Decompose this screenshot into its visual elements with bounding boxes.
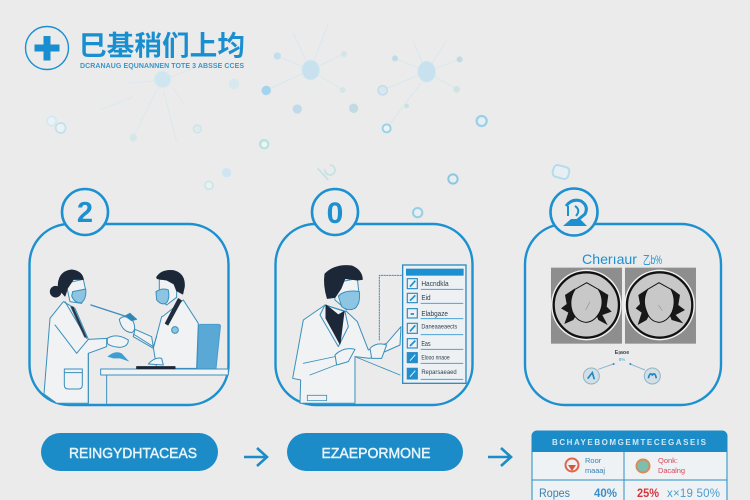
panel 3 heading: Cherıaur — [582, 251, 637, 267]
step number badge 2 — [312, 189, 358, 235]
panel 2: clinician checklist — [276, 189, 472, 405]
step number badge 1 — [62, 189, 108, 235]
illustration: masked doctor — [293, 266, 402, 403]
illustration: two masked doctors at desk — [44, 270, 228, 403]
checklist card: Reparsaeaed — [421, 370, 457, 376]
checklist card: Daneaaeaects — [421, 325, 457, 331]
checklist card: Elabgaze — [421, 311, 448, 318]
panel 3: chest imaging comparison — [525, 188, 721, 405]
table icon right — [636, 460, 650, 472]
checklist card: Eas — [421, 341, 431, 348]
checklist card: Eid — [421, 295, 431, 302]
checklist card: Elooo nnaoe — [421, 356, 450, 362]
arrow 2 — [488, 448, 511, 466]
label pill 2 — [287, 433, 463, 471]
table row values — [539, 488, 720, 500]
background: neuron network decoration — [47, 23, 570, 217]
checklist card: Hacndkla — [421, 281, 449, 288]
results table: maaaj — [585, 466, 605, 475]
table row values: 25% — [637, 488, 659, 500]
scan images — [551, 268, 696, 344]
table icon left — [566, 458, 578, 472]
table row values: x×19 50% — [667, 488, 720, 500]
title: 巳基稍们上均 — [79, 30, 245, 61]
checklist card — [403, 265, 466, 383]
label pill 2: EZAEPORMONE — [322, 446, 431, 462]
result icons with connectors — [583, 363, 660, 384]
logo icon: medical cross — [26, 26, 68, 70]
panel 3: chest imaging comparison: 8% — [619, 357, 625, 362]
step number badge 2: 0 — [327, 197, 343, 230]
table header — [532, 431, 727, 452]
step badge 3 — [550, 188, 598, 236]
table label left: Roor — [585, 456, 602, 465]
results table — [532, 431, 727, 500]
label pill 1 — [41, 433, 218, 471]
label pill 1: REINGYDHTACEAS — [69, 446, 197, 462]
subtitle: DCRANAUG EQUNANNEN TOTE 3 ABSSE CCES — [80, 63, 244, 70]
step number badge 1: 2 — [77, 197, 93, 229]
panel 1: consultation — [30, 189, 228, 405]
scan caption: Eᴉaoe — [615, 350, 629, 356]
table header: BCHAYEBOMGEMTECEGASEIS — [552, 438, 707, 447]
table row values: 40% — [594, 488, 617, 500]
panel 3: chest imaging comparison: 乙b% — [643, 254, 662, 267]
results table: Dacalng — [658, 466, 685, 475]
table label right: Qonk: — [658, 456, 678, 465]
arrow 1 — [244, 448, 267, 466]
table row values: Ropes — [539, 488, 570, 500]
